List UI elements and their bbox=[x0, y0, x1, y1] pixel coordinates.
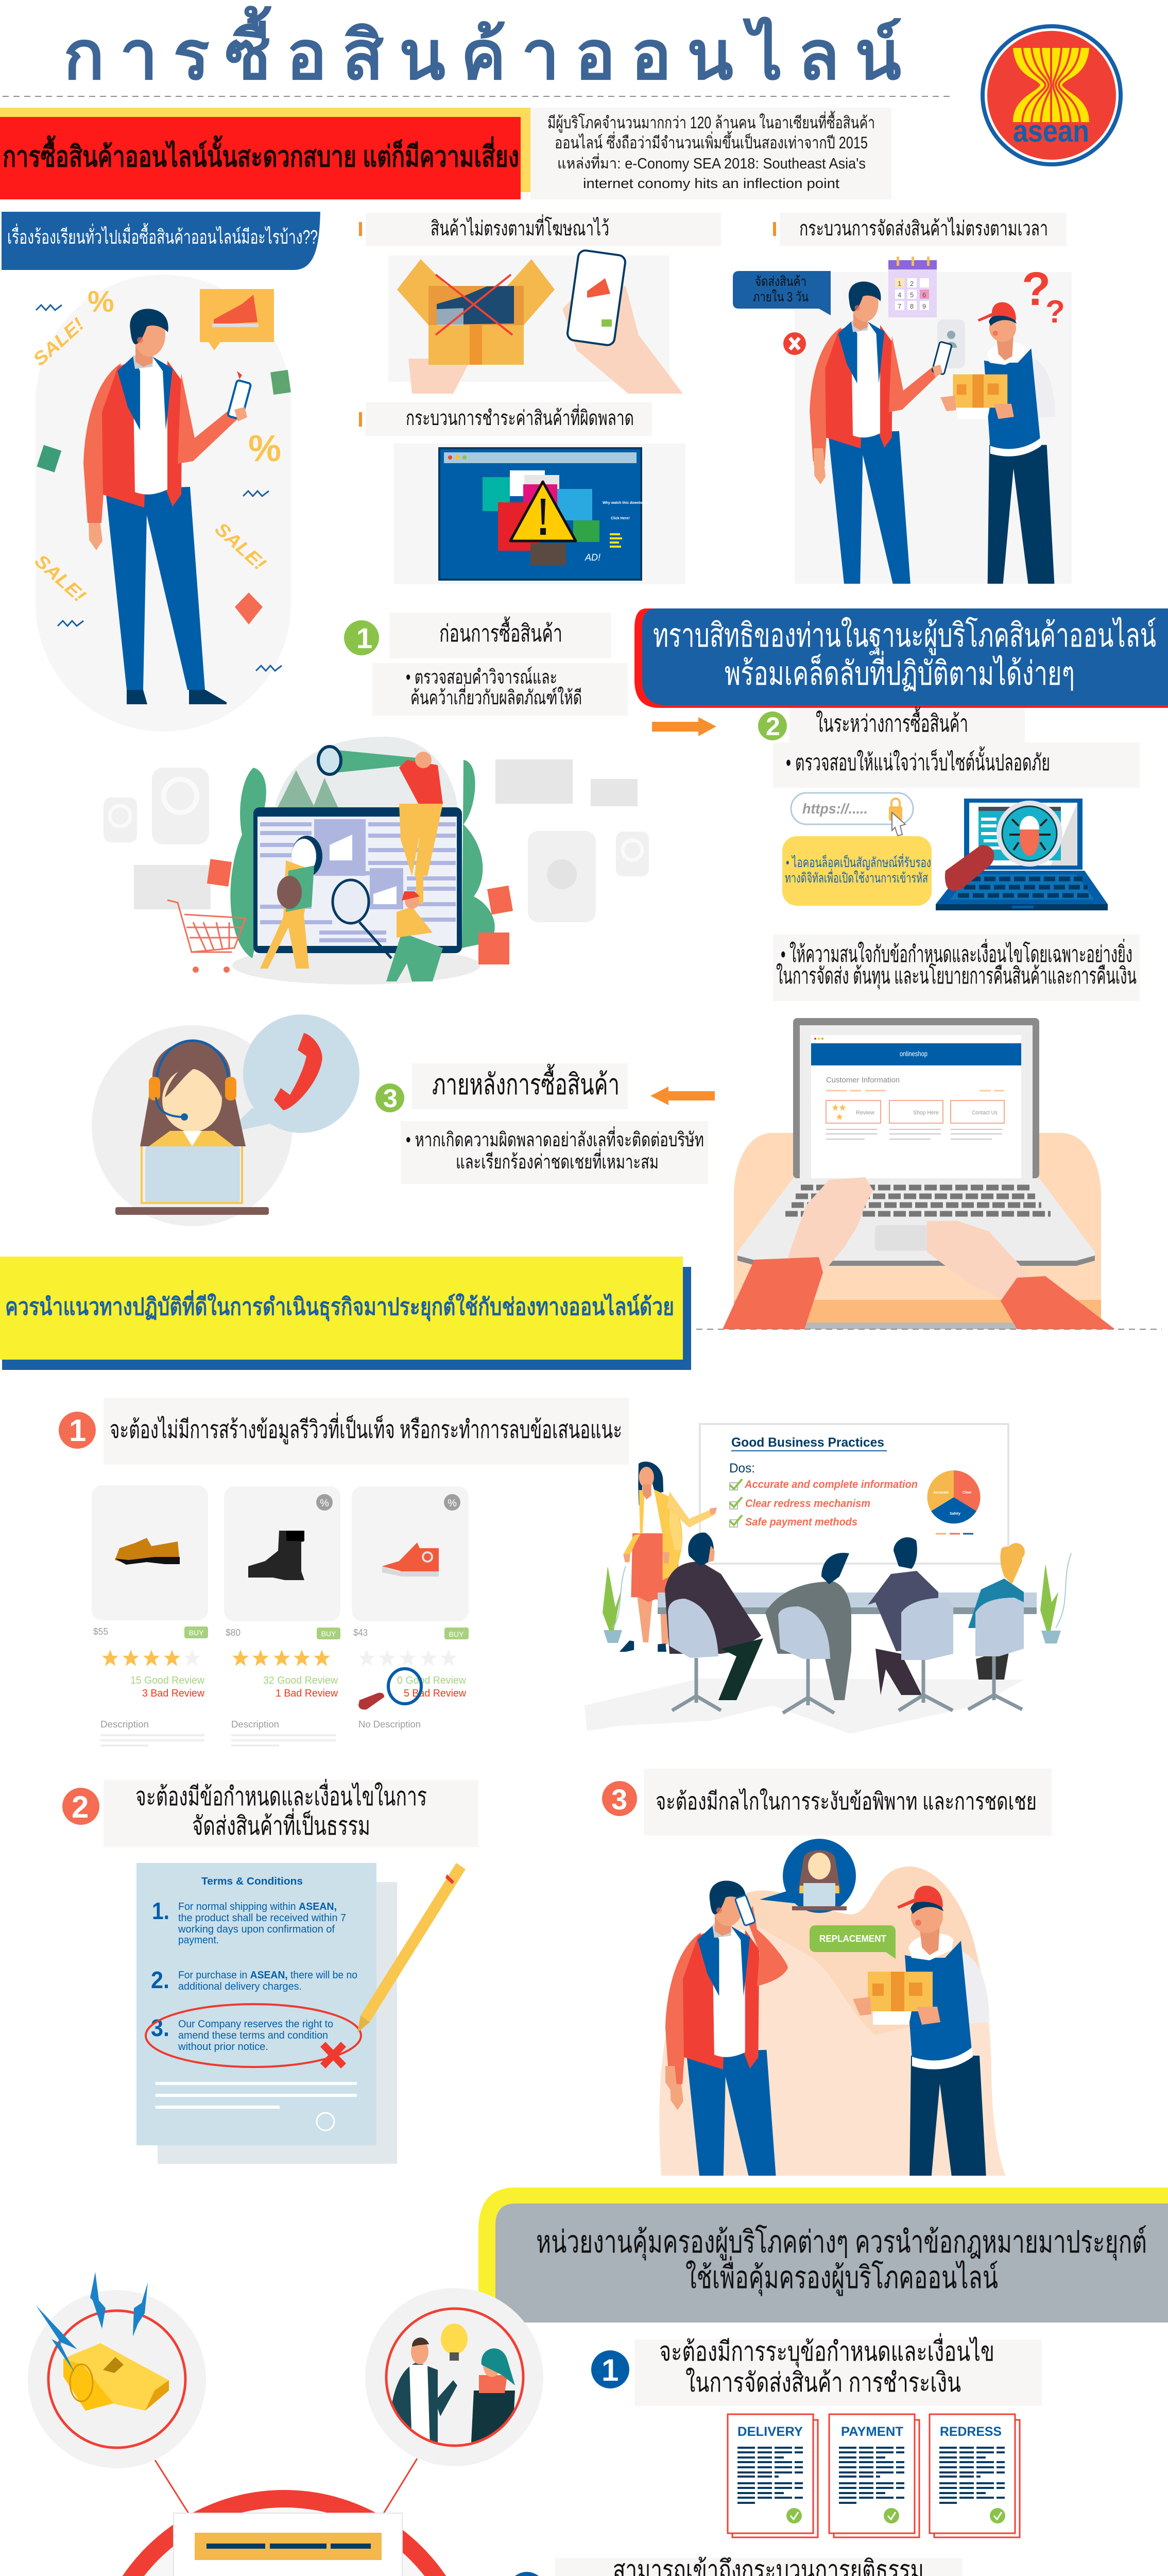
guideline 3: dispute resolution bbox=[602, 1769, 1052, 1836]
callout: replacement: REPLACEMENT bbox=[819, 1934, 886, 1944]
illustration: late delivery scene: ? bbox=[1022, 263, 1051, 315]
icon: calendar: 1 bbox=[898, 280, 901, 287]
heading: product differs from ad bbox=[359, 213, 721, 246]
chart: whiteboard good business practices: Safe payment methods bbox=[745, 1516, 857, 1528]
step 3: after buying bbox=[375, 1063, 708, 1184]
guideline 3: dispute resolution: 3 bbox=[611, 1783, 627, 1816]
illustration: late delivery scene: ? bbox=[1045, 294, 1065, 330]
banner: best practices for businesses bbox=[0, 1257, 691, 1370]
step 1: before buying: 1 bbox=[356, 622, 372, 654]
callout: replacement bbox=[810, 1925, 896, 1959]
arm with phone to ear bbox=[665, 1895, 788, 2092]
banner: convenient but risky: การซื้อสินค้าออนไลน์นั้นสะดวกสบาย แต่ก็มีความเสี่ยง bbox=[3, 135, 519, 173]
sleeve and phone bbox=[178, 371, 251, 464]
panel: shopper illustration: SALE! bbox=[29, 314, 88, 370]
plants bbox=[603, 1553, 1071, 1643]
illustration: https address bar bbox=[791, 793, 913, 836]
icon: pencil bbox=[357, 1863, 466, 2032]
step 3: after buying: 3 bbox=[383, 1084, 398, 1113]
meeting table bbox=[658, 1592, 1037, 1614]
heading: late delivery bbox=[773, 213, 1067, 246]
callout: delivered within 3 days: จัดส่งสินค้า bbox=[755, 274, 806, 289]
text block: online consumer statistics: ออนไลน์ ซึ่งถือว่ามีจำนวนเพิ่มขึ้นเป็นสองเท่าจากปี 2015 bbox=[555, 131, 868, 152]
panel: shopper illustration bbox=[29, 275, 291, 732]
icon: calendar: 4 bbox=[898, 291, 901, 299]
illustration: hands on laptop: Review bbox=[856, 1110, 874, 1116]
step 1: before buying bbox=[344, 613, 628, 716]
step 2: during purchase bbox=[758, 706, 1140, 788]
chart: whiteboard good business practices: Accurate and complete information bbox=[744, 1479, 918, 1490]
icon: phone speech bubble bbox=[227, 1014, 359, 1133]
action 1: terms for delivery and payment: ในการจัดส่งสินค้า การชำระเงิน bbox=[685, 2367, 961, 2398]
illustration: hands on laptop: Shop Here bbox=[913, 1110, 939, 1116]
document: terms and conditions: For normal shipping within ASEAN, bbox=[178, 1901, 337, 1912]
banner: convenient but risky bbox=[0, 108, 530, 199]
step 3: after buying: • หากเกิดความผิดพลาดอย่าลังเลที่จะติดต่อบริษัท bbox=[406, 1126, 704, 1151]
illustration: wrong product box and phone bbox=[388, 249, 683, 394]
presenter bbox=[620, 1462, 717, 1652]
illustration: replacement dispute bbox=[659, 1839, 1006, 2176]
text block: online consumer statistics bbox=[530, 108, 891, 199]
action 1: terms for delivery and payment: จะต้องมีการระบุข้อกำหนดและเงื่อนไข bbox=[659, 2333, 994, 2368]
action 1: terms for delivery and payment bbox=[591, 2333, 1042, 2406]
callout: lock icon explanation: ทางดิจิทัลเพื่อเปิดใช้งานการเข้ารหัส bbox=[785, 869, 928, 886]
product card 2: Description bbox=[231, 1719, 279, 1730]
document: terms and conditions: 1. bbox=[152, 1897, 169, 1924]
document: redress bbox=[930, 2414, 1020, 2537]
document: terms and conditions: working days upon confirmation of bbox=[178, 1924, 335, 1935]
document: terms and conditions: Our Company reserves the right to bbox=[178, 2019, 333, 2030]
step 2: during purchase: ในระหว่างการซื้อสินค้า bbox=[816, 706, 968, 737]
text block: online consumer statistics: แหล่งที่มา: e-Conomy SEA 2018: Southeast Asia's bbox=[557, 153, 866, 172]
text block: online consumer statistics: มีผู้บริโภคจำนวนมากกว่า 120 ล้านคน ในอาเซียนที่ซื้อสินค้า bbox=[547, 111, 875, 133]
illustration: malicious ad pop-ups: AD! bbox=[585, 552, 600, 563]
document: payment bbox=[829, 2414, 919, 2537]
product card 2 bbox=[224, 1486, 340, 1745]
action 2: justice and redress bbox=[508, 2555, 963, 2576]
callout: delivered within 3 days: ภายใน 3 วัน bbox=[753, 289, 809, 304]
icon: calendar: 7 bbox=[898, 302, 901, 310]
step 1: before buying: ก่อนการซื้อสินค้า bbox=[439, 616, 562, 647]
panel: shopper illustration: SALE! bbox=[211, 518, 270, 574]
icon: idea circle bbox=[365, 2288, 543, 2466]
text block: terms and conditions advice bbox=[773, 935, 1140, 1001]
text block: online consumer statistics: internet conomy hits an inflection point bbox=[583, 176, 840, 191]
document: terms and conditions: additional delivery charges. bbox=[178, 1981, 302, 1992]
document: delivery bbox=[728, 2414, 818, 2537]
illustration: business meeting bbox=[585, 1424, 1071, 1734]
heading: product differs from ad: สินค้าไม่ตรงตามที่โฆษณาไว้ bbox=[431, 214, 609, 240]
guideline 3: dispute resolution: จะต้องมีกลไกในการระงับข้อพิพาท และการชดเชย bbox=[656, 1788, 1037, 1815]
document: terms and conditions: 3. bbox=[151, 2014, 169, 2041]
heading: late delivery: กระบวนการจัดส่งสินค้าไม่ตรงตามเวลา bbox=[799, 217, 1048, 240]
icon: magnifier bbox=[358, 1669, 421, 1709]
step 3: after buying: และเรียกร้องค่าชดเชยที่เหมาะสม bbox=[456, 1148, 659, 1173]
step 1: before buying: • ตรวจสอบคำวิจารณ์และ bbox=[406, 666, 557, 688]
illustration: malicious ad pop-ups: Click Here! bbox=[611, 517, 630, 520]
document: terms and conditions: payment. bbox=[178, 1935, 219, 1946]
icon: calendar: 2 bbox=[910, 280, 914, 287]
guideline 2: fair terms bbox=[62, 1779, 478, 1847]
product card 1: BUY bbox=[189, 1629, 204, 1637]
attendee 3 bbox=[868, 1537, 953, 1710]
illustration: late delivery scene bbox=[733, 257, 1072, 635]
guideline 1: no fake reviews: 1 bbox=[69, 1413, 86, 1448]
callout: agent bubble bbox=[760, 1839, 856, 1913]
product card 3: No Description bbox=[358, 1719, 421, 1730]
product card 3: 5 Bad Review bbox=[404, 1688, 467, 1699]
product card 2: % bbox=[320, 1498, 329, 1509]
panel: shopper illustration: % bbox=[88, 285, 114, 318]
arrow: step 2 to step 3 bbox=[650, 1087, 715, 1105]
icon: calendar: 9 bbox=[922, 302, 926, 310]
panel: shopper illustration: % bbox=[248, 428, 281, 469]
document: terms and conditions: amend these terms and condition bbox=[178, 2030, 328, 2041]
chart: whiteboard good business practices: Dos: bbox=[729, 1461, 755, 1476]
icon: asean logo: asean bbox=[1013, 114, 1089, 148]
document: terms and conditions: the product shall be received within 7 bbox=[178, 1912, 346, 1924]
icon: calendar: 6 bbox=[922, 291, 926, 299]
product card 2: 1 Bad Review bbox=[276, 1688, 338, 1699]
product card 3: BUY bbox=[449, 1630, 464, 1638]
illustration: approved document bbox=[98, 2499, 471, 2576]
icon: speech bubble with sneaker bbox=[200, 289, 274, 350]
product card 3: $43 bbox=[353, 1628, 368, 1638]
document: redress: REDRESS bbox=[940, 2425, 1002, 2439]
heading: know your rights bbox=[634, 608, 1168, 708]
heading: consumer protection agencies: ใช้เพื่อคุ้มครองผู้บริโภคออนไลน์ bbox=[685, 2256, 998, 2296]
action 1: terms for delivery and payment: 1 bbox=[602, 2353, 619, 2387]
panel: shopper illustration: SALE! bbox=[31, 550, 90, 606]
step 3: after buying: ภายหลังการซื้อสินค้า bbox=[432, 1064, 620, 1100]
chart: whiteboard good business practices: Clear bbox=[963, 1491, 972, 1495]
step 1: before buying: ค้นคว้าเกี่ยวกับผลิตภัณฑ์ให้ดี bbox=[410, 684, 582, 709]
product card 1: 3 Bad Review bbox=[142, 1688, 205, 1699]
guideline 1: no fake reviews: จะต้องไม่มีการสร้างข้อมูลรีวิวที่เป็นเท็จ หรือกระทำการลบข้อเสนอแนะ bbox=[110, 1412, 622, 1445]
icon: warning triangle bbox=[510, 482, 576, 541]
product card 1: 15 Good Review bbox=[130, 1675, 205, 1686]
product card 2: $80 bbox=[226, 1628, 241, 1638]
title: การซื้อสินค้าออนไลน์ bbox=[63, 5, 901, 93]
illustration: hands on laptop bbox=[723, 1018, 1115, 1329]
document: terms and conditions: Terms & Conditions bbox=[201, 1876, 303, 1887]
icon: red x bbox=[783, 332, 806, 355]
phone arm bbox=[814, 336, 952, 473]
icon: whistle circle bbox=[28, 2272, 206, 2468]
illustration: laptop with bug bbox=[936, 799, 1108, 910]
heading: common complaints: เรื่องร้องเรียนทั่วไปเมื่อซื้อสินค้าออนไลน์มีอะไรบ้าง?? bbox=[7, 223, 318, 248]
attendee 4 bbox=[968, 1543, 1025, 1709]
guideline 2: fair terms: จะต้องมีข้อกำหนดและเงื่อนไขในการ bbox=[135, 1779, 427, 1811]
chart: whiteboard good business practices: Accurate bbox=[933, 1491, 949, 1495]
arrow: step 1 to step 2 bbox=[652, 717, 716, 736]
chart: whiteboard good business practices: Clear redress mechanism bbox=[745, 1498, 870, 1510]
guideline 2: fair terms: จัดส่งสินค้าที่เป็นธรรม bbox=[192, 1808, 370, 1840]
icon: calendar: 5 bbox=[910, 291, 914, 299]
illustration: hands on laptop: Contact Us bbox=[972, 1110, 998, 1116]
product card 2: BUY bbox=[321, 1630, 336, 1638]
chart: whiteboard good business practices: Good Business Practices bbox=[731, 1435, 884, 1450]
illustration: https address bar: https://..... bbox=[802, 801, 868, 817]
illustration: call centre agent bbox=[92, 1014, 359, 1226]
chart: whiteboard good business practices: Safety bbox=[950, 1512, 960, 1516]
illustration: hands on laptop: Customer Information bbox=[826, 1076, 900, 1084]
icon: calendar bbox=[888, 257, 937, 317]
callout: delivered within 3 days bbox=[733, 271, 831, 315]
heading: common complaints bbox=[2, 212, 320, 270]
document: payment: PAYMENT bbox=[841, 2425, 903, 2439]
icon: calendar: 8 bbox=[910, 302, 914, 310]
product card 2: 32 Good Review bbox=[263, 1675, 338, 1686]
illustration: malicious ad pop-ups bbox=[394, 444, 685, 584]
document: terms and conditions: without prior notice. bbox=[178, 2041, 268, 2053]
icon: shopping cart bbox=[167, 900, 246, 952]
icon: telescope bbox=[318, 747, 425, 774]
callout: lock icon explanation bbox=[782, 836, 932, 906]
product card 3: % bbox=[448, 1498, 457, 1509]
document: terms and conditions: 2. bbox=[151, 1967, 169, 1993]
connector lines bbox=[155, 2459, 417, 2513]
illustration: hands on laptop: onlineshop bbox=[900, 1049, 927, 1058]
heading: consumer protection agencies bbox=[478, 2188, 1168, 2323]
callout: lock icon explanation: • ไอคอนล็อคเป็นสัญลักษณ์ที่รับรอง bbox=[786, 853, 931, 870]
product card 1 bbox=[92, 1485, 208, 1745]
heading: payment errors: กระบวนการชำระค่าสินค้าที่ผิดพลาด bbox=[406, 404, 634, 430]
product card 3: 0 Good Review bbox=[397, 1675, 467, 1686]
guideline 2: fair terms: 2 bbox=[72, 1790, 89, 1824]
illustration: online research with tablet bbox=[104, 737, 649, 985]
illustration: malicious ad pop-ups: Why watch this download? bbox=[603, 501, 649, 505]
attendee 2 bbox=[765, 1553, 851, 1713]
document: delivery: DELIVERY bbox=[737, 2425, 803, 2439]
documents: delivery, payment, redress bbox=[728, 2414, 1020, 2537]
banner: best practices for businesses: ควรนำแนวทางปฏิบัติที่ดีในการดำเนินธุรกิจมาประยุกต์ใช้กับช่องทางออนไลน์ด้วย bbox=[5, 1290, 674, 1321]
product card 3 bbox=[352, 1486, 469, 1730]
panel: product cards bbox=[92, 1485, 469, 1745]
chart: whiteboard good business practices bbox=[700, 1424, 1008, 1564]
product card 1: $55 bbox=[93, 1626, 108, 1637]
product card 1: Description bbox=[100, 1719, 149, 1730]
heading: payment errors bbox=[359, 402, 652, 436]
document: terms and conditions bbox=[136, 1863, 397, 2164]
step 2: during purchase: 2 bbox=[766, 712, 780, 741]
document: terms and conditions: For purchase in ASEAN, there will be no bbox=[178, 1970, 357, 1981]
guideline 1: no fake reviews bbox=[59, 1398, 629, 1465]
icon: asean logo bbox=[981, 24, 1123, 166]
attendee 1 bbox=[665, 1533, 763, 1710]
